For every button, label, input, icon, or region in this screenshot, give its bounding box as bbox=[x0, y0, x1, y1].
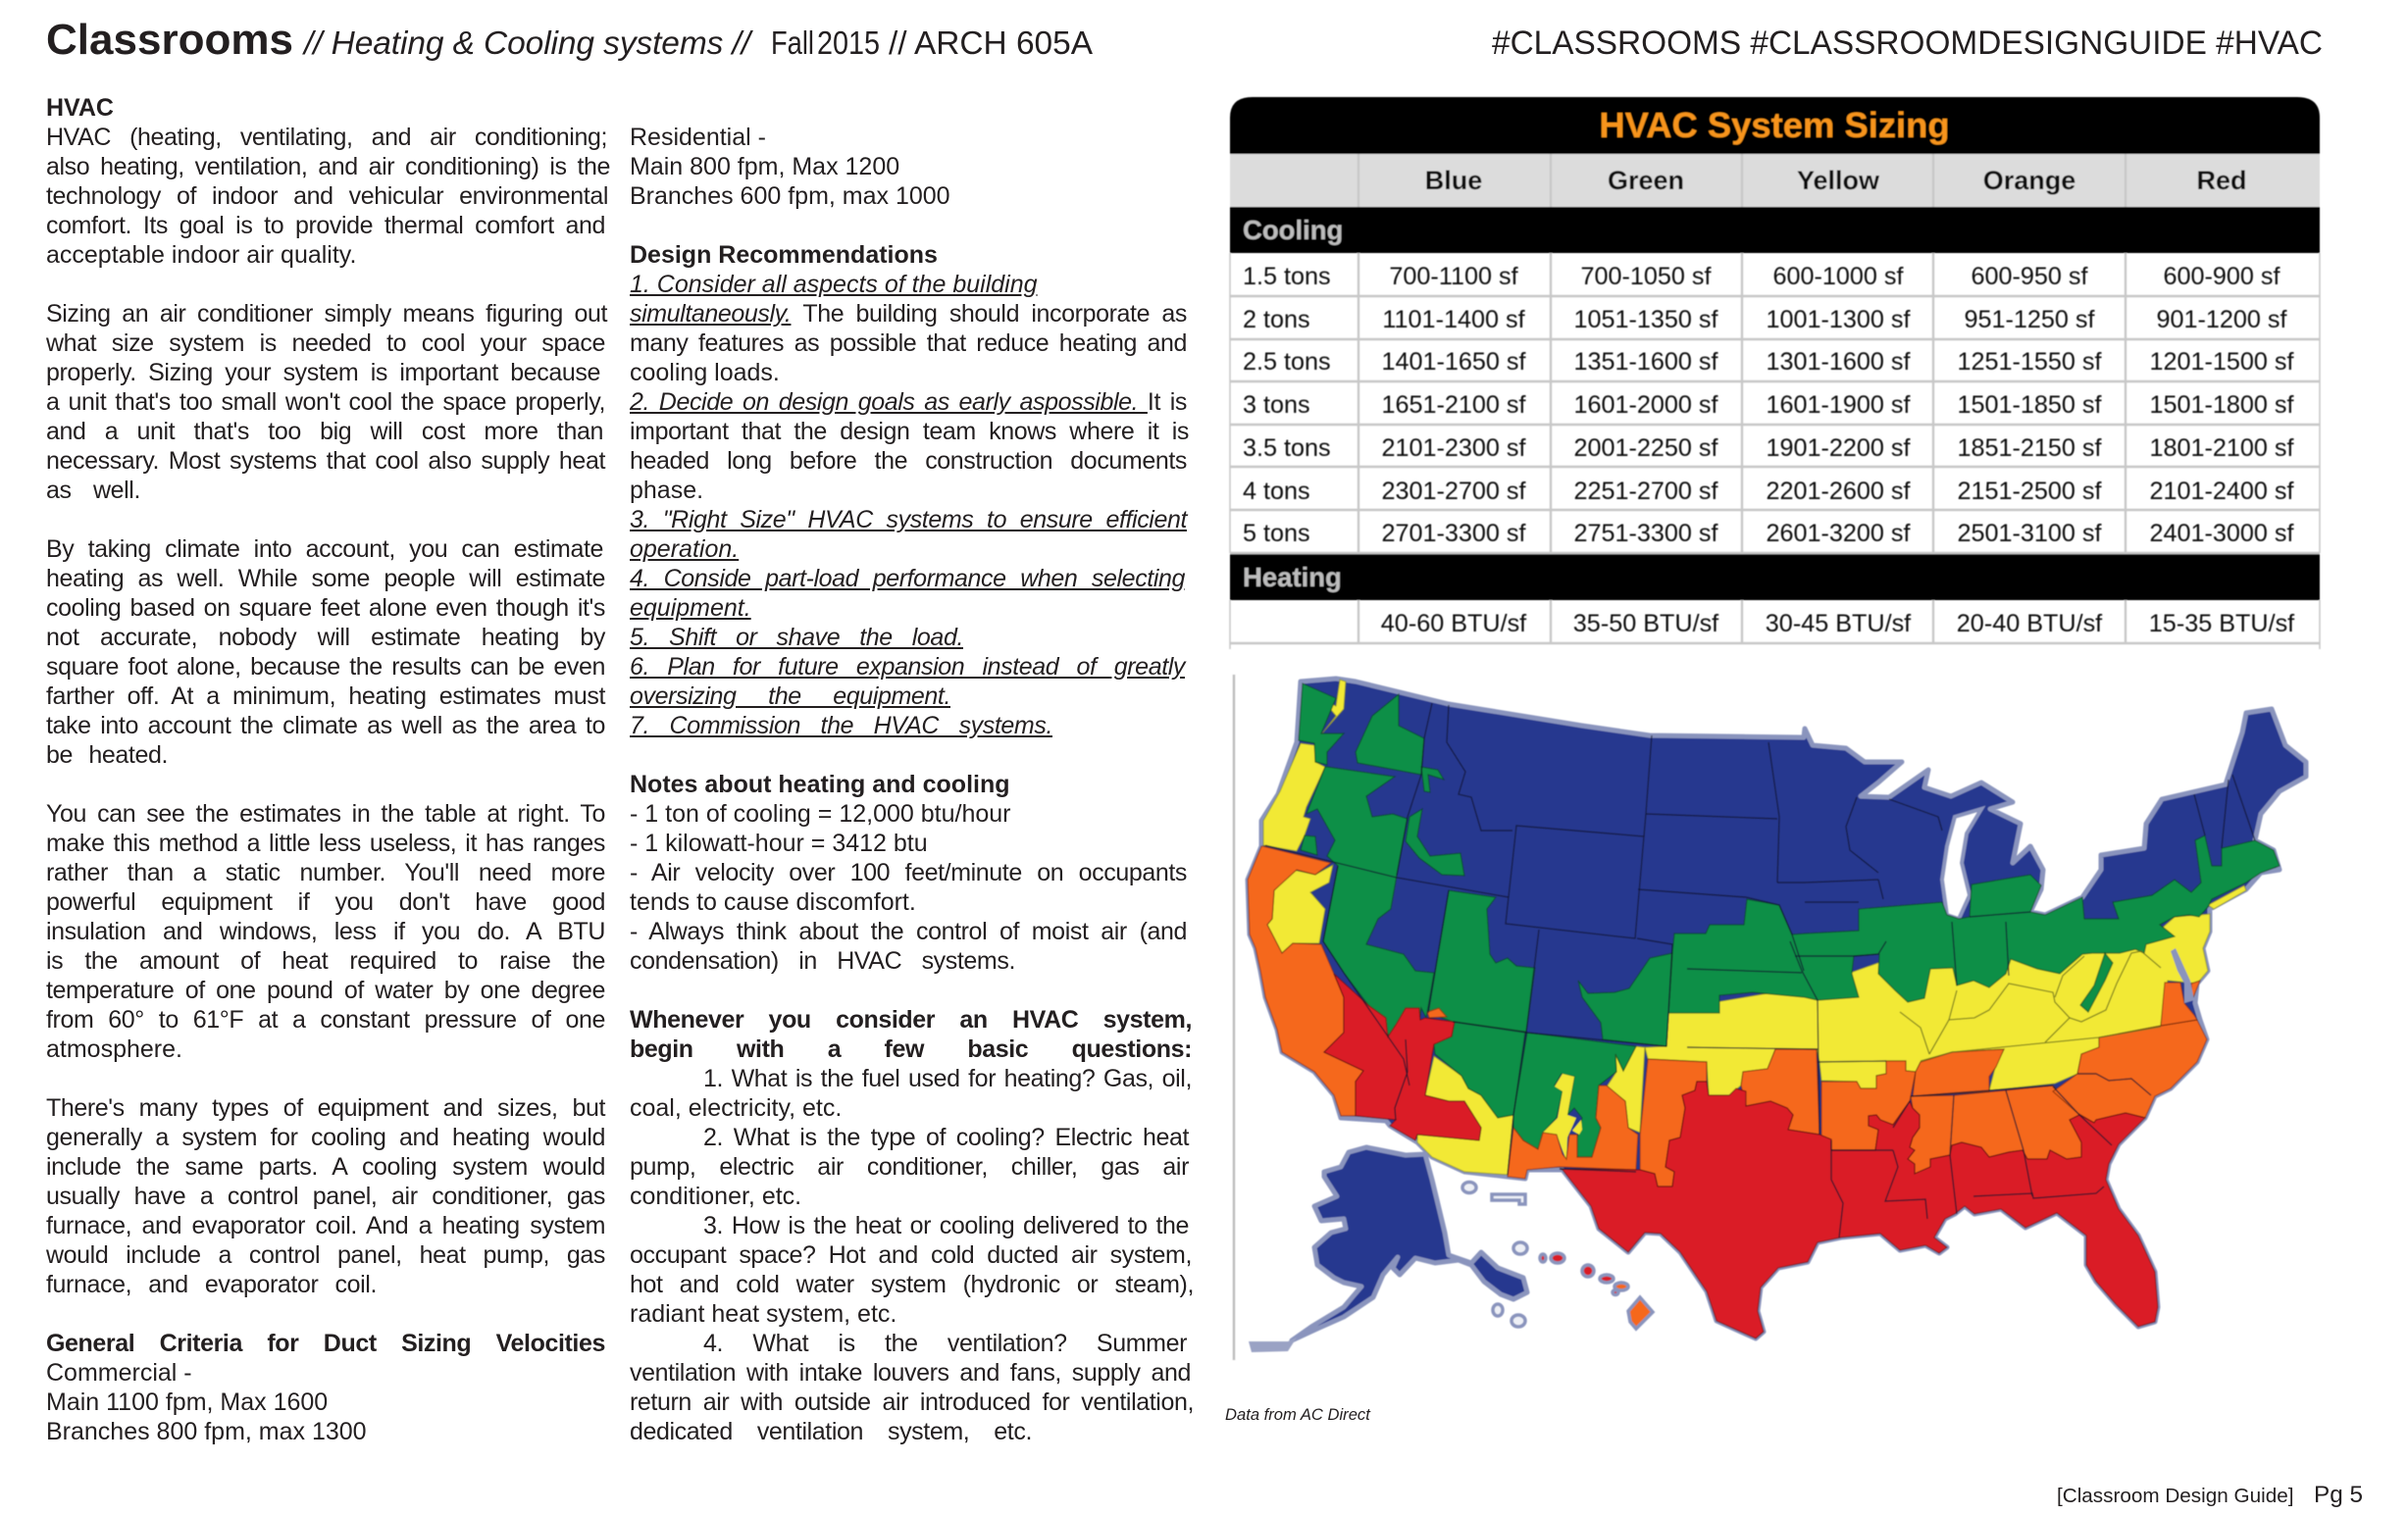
cooling rows: 600-950 sf bbox=[1971, 263, 2089, 290]
text column 1: cooling based on square feet alone even though it's bbox=[46, 594, 605, 622]
text column 2: Residential - bbox=[630, 124, 766, 151]
text column 1: technology of indoor and vehicular environmental bbox=[46, 182, 608, 210]
text column 1: HVAC (heating, ventilating, and air conditioning; bbox=[46, 124, 607, 151]
map: US HVAC climate zones bbox=[1234, 675, 2306, 1360]
heating row: 30-45 BTU/sf bbox=[1766, 610, 1912, 637]
text column 2: 4. What is the ventilation? Summer bbox=[703, 1330, 1187, 1357]
cooling rows: 1901-2200 sf bbox=[1766, 434, 1912, 462]
cooling rows: 1801-2100 sf bbox=[2149, 434, 2295, 462]
cooling rows: 600-1000 sf bbox=[1772, 263, 1905, 290]
cooling rows: 2151-2500 sf bbox=[1957, 478, 2103, 505]
text column 1: would include a control panel, heat pump, gas bbox=[46, 1241, 605, 1269]
map zone: orange bbox=[1248, 846, 2207, 1187]
text column 2: coal, electricity, etc. bbox=[630, 1094, 842, 1122]
cooling rows: 3.5 tons bbox=[1243, 434, 1331, 462]
table column headers: Orange bbox=[1983, 166, 2075, 195]
cooling rows: 2001-2250 sf bbox=[1573, 434, 1719, 462]
heating section bar bbox=[1230, 554, 2320, 600]
text column 1: include the same parts. A cooling system would bbox=[46, 1153, 605, 1181]
text column 2: Design Recommendations bbox=[630, 241, 938, 269]
footer: guide name: [Classroom Design Guide] bbox=[2057, 1485, 2293, 1507]
panel: HVAC system sizing table bbox=[1230, 97, 2320, 649]
text column 2: important that the design team knows where it is bbox=[630, 418, 1189, 445]
heating row: 35-50 BTU/sf bbox=[1573, 610, 1719, 637]
text column 2: 7. Commission the HVAC systems. bbox=[630, 712, 1052, 739]
heating row bbox=[1381, 610, 2295, 637]
cooling rows: 2.5 tons bbox=[1243, 348, 1331, 376]
text column 1: insulation and windows, less if you do. A BTU bbox=[46, 918, 605, 945]
text column 1: necessary. Most systems that cool also supply heat bbox=[46, 447, 605, 475]
map: state borders inside yellow zone bbox=[1900, 951, 2161, 1061]
cooling rows: 2751-3300 sf bbox=[1573, 520, 1719, 547]
table title bar: HVAC System Sizing bbox=[1599, 105, 1950, 145]
cooling rows: 1851-2150 sf bbox=[1957, 434, 2103, 462]
text column 2: 2. What is the type of cooling? Electric heat bbox=[703, 1124, 1189, 1151]
cooling rows: 700-1050 sf bbox=[1580, 263, 1713, 290]
text column 1: By taking climate into account, you can estimate bbox=[46, 535, 603, 563]
text column 1 bbox=[46, 94, 610, 1445]
cooling section bar bbox=[1230, 207, 2320, 253]
text column 1: powerful equipment if you don't have good bbox=[46, 888, 605, 916]
cooling rows: 951-1250 sf bbox=[1964, 306, 2096, 333]
text column 1: There's many types of equipment and sizes, but bbox=[46, 1094, 605, 1122]
text column 1: square foot alone, because the results can be even bbox=[46, 653, 605, 681]
title: Fall bbox=[771, 25, 814, 61]
heating section bar: Heating bbox=[1243, 562, 1342, 592]
cooling rows: 1501-1800 sf bbox=[2149, 391, 2295, 419]
text column 2: 1. What is the fuel used for heating? Gas, oil, bbox=[703, 1065, 1192, 1092]
title: Classrooms bbox=[46, 16, 293, 64]
cooling rows: 2401-3000 sf bbox=[2149, 520, 2295, 547]
cooling rows: 1601-1900 sf bbox=[1766, 391, 1912, 419]
text column 2: hot and cold water system (hydronic or steam), bbox=[630, 1271, 1194, 1298]
text column 2: equipment. bbox=[630, 594, 751, 622]
text column 2: return air with outside air introduced for ventilation, bbox=[630, 1389, 1194, 1416]
heating row: 40-60 BTU/sf bbox=[1381, 610, 1527, 637]
cooling rows: 1001-1300 sf bbox=[1766, 306, 1912, 333]
map zone: blue base with coastline bbox=[1248, 679, 2306, 1338]
cooling rows: 1401-1650 sf bbox=[1381, 348, 1527, 376]
text column 2: Main 800 fpm, Max 1200 bbox=[630, 153, 899, 180]
map: state borders bbox=[1265, 703, 2255, 1237]
cooling rows: 600-900 sf bbox=[2163, 263, 2281, 290]
text column 1: Sizing an air conditioner simply means figuring out bbox=[46, 300, 607, 328]
text column 1: a unit that's too small won't cool the space properly, bbox=[46, 388, 605, 416]
cooling rows: 2301-2700 sf bbox=[1381, 478, 1527, 505]
text column 1: Main 1100 fpm, Max 1600 bbox=[46, 1389, 328, 1416]
text column 1: what size system is needed to cool your space bbox=[46, 329, 605, 357]
cooling rows: 2701-3300 sf bbox=[1381, 520, 1527, 547]
map: Alaska bbox=[1249, 1147, 1527, 1352]
cooling rows: 1601-2000 sf bbox=[1573, 391, 1719, 419]
title bbox=[46, 16, 1093, 64]
text column 2: condensation) in HVAC systems. bbox=[630, 947, 1015, 975]
text column 2: - 1 ton of cooling = 12,000 btu/hour bbox=[630, 800, 1010, 828]
cooling rows: 901-1200 sf bbox=[2156, 306, 2288, 333]
text column 2: occupant space? Hot and cold ducted air system, bbox=[630, 1241, 1192, 1269]
text column 2: conditioner, etc. bbox=[630, 1183, 801, 1210]
text column 1: General Criteria for Duct Sizing Velocities bbox=[46, 1330, 605, 1357]
text column 1: properly. Sizing your system is important because bbox=[46, 359, 600, 386]
text column 1: rather than a static number. You'll need more bbox=[46, 859, 605, 886]
cooling rows: 1501-1850 sf bbox=[1957, 391, 2103, 419]
text column 2: - Air velocity over 100 feet/minute on occupants bbox=[630, 859, 1187, 886]
text column 1: also heating, ventilation, and air conditioning) is the bbox=[46, 153, 610, 180]
text column 2: cooling loads. bbox=[630, 359, 780, 386]
heating row: 20-40 BTU/sf bbox=[1957, 610, 2103, 637]
text column 2: oversizing the equipment. bbox=[630, 682, 950, 710]
heating row: 15-35 BTU/sf bbox=[2149, 610, 2295, 637]
title: // Heating & Cooling systems // bbox=[302, 25, 754, 62]
text column 2: phase. bbox=[630, 477, 703, 504]
cooling rows: 2251-2700 sf bbox=[1573, 478, 1719, 505]
text column 2: begin with a few basic questions: bbox=[630, 1035, 1192, 1063]
table column headers: Red bbox=[2196, 166, 2247, 195]
text column 2: operation. bbox=[630, 535, 739, 563]
text column 1: make this method a little less useless, it has ranges bbox=[46, 830, 605, 857]
cooling rows: 1101-1400 sf bbox=[1382, 306, 1526, 333]
text column 2: Branches 600 fpm, max 1000 bbox=[630, 182, 950, 210]
text column 2: 4. Conside part-load performance when selecting bbox=[630, 565, 1185, 592]
text column 1: not accurate, nobody will estimate heating by bbox=[46, 624, 605, 651]
text column 2: radiant heat system, etc. bbox=[630, 1300, 897, 1328]
text column 1: Commercial - bbox=[46, 1359, 192, 1387]
text column 2: Whenever you consider an HVAC system, bbox=[630, 1006, 1192, 1034]
text column 1: be heated. bbox=[46, 741, 168, 769]
map zone: green band bbox=[1299, 683, 2280, 1157]
table column headers: Green bbox=[1608, 166, 1684, 195]
text column 2: many features as possible that reduce heating and bbox=[630, 329, 1187, 357]
text column 1: acceptable indoor air quality. bbox=[46, 241, 356, 269]
table title bar bbox=[1230, 97, 2320, 154]
text column 1: temperature of one pound of water by one degree bbox=[46, 977, 605, 1004]
cooling rows: 2601-3200 sf bbox=[1766, 520, 1912, 547]
text column 2 bbox=[630, 124, 1194, 1445]
text column 2: - 1 kilowatt-hour = 3412 btu bbox=[630, 830, 928, 857]
text column 1: take into account the climate as well as the area to bbox=[46, 712, 605, 739]
cooling rows: 1651-2100 sf bbox=[1381, 391, 1527, 419]
cooling rows: 1.5 tons bbox=[1243, 263, 1331, 290]
cooling rows: 1201-1500 sf bbox=[2149, 348, 2295, 376]
table column headers: Yellow bbox=[1797, 166, 1880, 195]
table column headers: Blue bbox=[1425, 166, 1482, 195]
title: // ARCH 605A bbox=[889, 25, 1093, 61]
text column 2: 3. "Right Size" HVAC systems to ensure efficient bbox=[630, 506, 1187, 533]
map: Hawaii bbox=[1540, 1253, 1653, 1329]
cooling rows: 1251-1550 sf bbox=[1957, 348, 2103, 376]
text column 1: from 60° to 61°F at a constant pressure of one bbox=[46, 1006, 605, 1034]
text column 1: generally a system for cooling and heating would bbox=[46, 1124, 605, 1151]
map: small western islands bbox=[1462, 1183, 1527, 1327]
cooling rows: 3 tons bbox=[1243, 391, 1310, 419]
cooling rows: 2501-3100 sf bbox=[1957, 520, 2103, 547]
cooling rows: 2101-2300 sf bbox=[1381, 434, 1527, 462]
text column 2: dedicated ventilation system, etc. bbox=[630, 1418, 1032, 1445]
text column 2: 6. Plan for future expansion instead of greatly bbox=[630, 653, 1185, 681]
cooling rows: 2101-2400 sf bbox=[2149, 478, 2295, 505]
text column 2: 3. How is the heat or cooling delivered to the bbox=[703, 1212, 1189, 1239]
cooling rows: 1051-1350 sf bbox=[1573, 306, 1719, 333]
text column 2: headed long before the construction documents bbox=[630, 447, 1187, 475]
cooling section bar: Cooling bbox=[1243, 215, 1343, 245]
text column 1: is the amount of heat required to raise the bbox=[46, 947, 605, 975]
title: 2015 bbox=[817, 25, 880, 61]
cooling rows: 4 tons bbox=[1243, 478, 1310, 505]
text column 2: tends to cause discomfort. bbox=[630, 888, 916, 916]
text column 1: comfort. Its goal is to provide thermal comfort and bbox=[46, 212, 605, 239]
text column 1: You can see the estimates in the table at right. To bbox=[46, 800, 605, 828]
text column 1: farther off. At a minimum, heating estimates must bbox=[46, 682, 605, 710]
table column headers bbox=[1230, 154, 2320, 207]
text column 1: as well. bbox=[46, 477, 140, 504]
map zone: yellow pockets bbox=[1543, 1074, 1582, 1160]
text column 1: furnace, and evaporator coil. bbox=[46, 1271, 377, 1298]
cooling rows: 2 tons bbox=[1243, 306, 1310, 333]
text column 2: simultaneously. The building should incorporate as bbox=[630, 300, 1187, 328]
text column 2: 1. Consider all aspects of the building bbox=[630, 271, 1038, 298]
text column 1: and a unit that's too big will cost more than bbox=[46, 418, 603, 445]
cooling rows: 1301-1600 sf bbox=[1766, 348, 1912, 376]
map: Chesapeake Bay bbox=[2171, 948, 2194, 1003]
text column 1: Branches 800 fpm, max 1300 bbox=[46, 1418, 367, 1445]
map: Lake Michigan bbox=[1942, 809, 1981, 919]
cooling rows: 2201-2600 sf bbox=[1766, 478, 1912, 505]
cooling rows: 5 tons bbox=[1243, 520, 1310, 547]
cooling rows: 700-1100 sf bbox=[1389, 263, 1519, 290]
text column 2: Notes about heating and cooling bbox=[630, 771, 1010, 798]
footer: page number: Pg 5 bbox=[2314, 1482, 2363, 1508]
text column 2: pump, electric air conditioner, chiller, gas air bbox=[630, 1153, 1189, 1181]
text column 1: furnace, and evaporator coil. And a heating system bbox=[46, 1212, 605, 1239]
text column 2: 2. Decide on design goals as early aspossible. It is bbox=[630, 388, 1187, 416]
text column 2: 5. Shift or shave the load. bbox=[630, 624, 963, 651]
text column 1: heating as well. While some people will estimate bbox=[46, 565, 605, 592]
text column 2: ventilation with intake louvers and fans, supply and bbox=[630, 1359, 1191, 1387]
map zone: red bbox=[1324, 974, 2158, 1338]
map source note: Data from AC Direct bbox=[1225, 1405, 1371, 1424]
text column 1: usually have a control panel, air conditioner, gas bbox=[46, 1183, 605, 1210]
text column 1: atmosphere. bbox=[46, 1035, 182, 1063]
cooling rows bbox=[1243, 263, 2295, 547]
map zone: yellow band bbox=[1263, 680, 2246, 1175]
cooling rows: 1351-1600 sf bbox=[1573, 348, 1719, 376]
hashtags: #CLASSROOMS #CLASSROOMDESIGNGUIDE #HVAC bbox=[1492, 25, 2323, 62]
text column 1: HVAC bbox=[46, 94, 114, 122]
text column 2: - Always think about the control of moist air (and bbox=[630, 918, 1187, 945]
